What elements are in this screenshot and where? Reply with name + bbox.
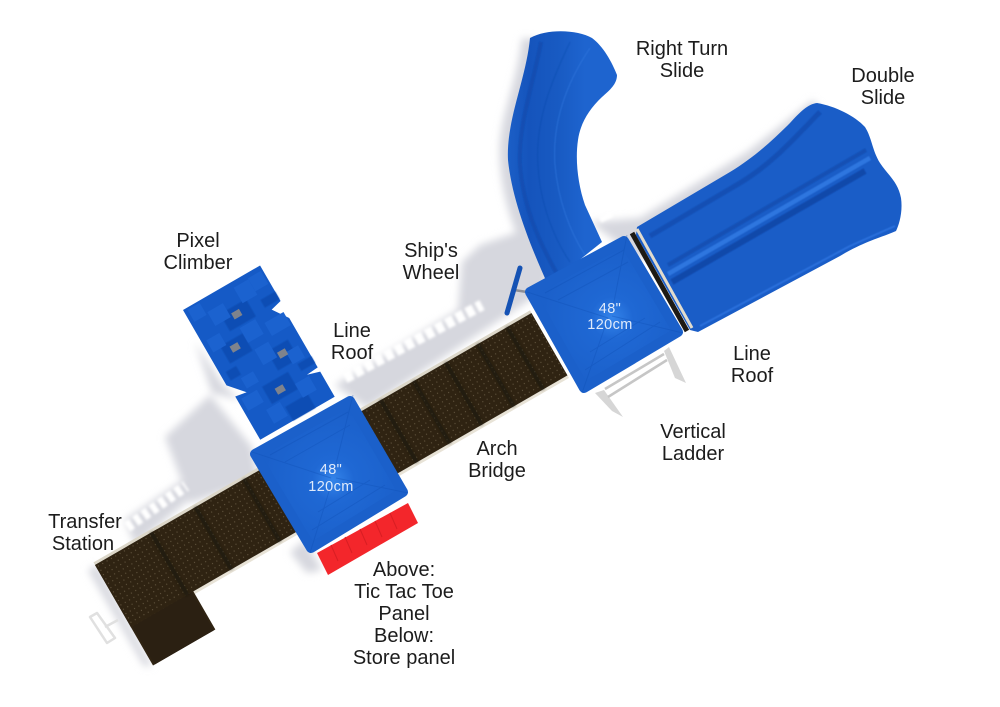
- right turn slide: [508, 31, 617, 285]
- pixel climber: [183, 266, 336, 441]
- transfer station steps: [90, 613, 118, 643]
- red tic tac toe panel: [317, 503, 418, 575]
- label: vertical ladder: Vertical: [660, 421, 726, 443]
- line roof right with 48 inch deck height: 48": [599, 301, 621, 317]
- line roof right with 48 inch deck height: 120cm: [587, 317, 633, 333]
- line roof left with 48 inch deck height: 48": [320, 462, 342, 478]
- label: panels above and below: Below:: [374, 625, 434, 647]
- label: right turn slide: Right Turn: [636, 38, 728, 60]
- label: double slide: Slide: [861, 87, 905, 109]
- line roof left with 48 inch deck height: [252, 395, 408, 553]
- vertical ladder: [595, 347, 686, 417]
- bridge and transfer station deck: [94, 310, 589, 665]
- label: panels above and below: Above:: [373, 559, 435, 581]
- label: ship's wheel: Wheel: [403, 262, 459, 284]
- label: line roof left: Line: [333, 320, 371, 342]
- label: double slide: Double: [851, 65, 915, 87]
- line roof left with 48 inch deck height: 120cm: [308, 479, 354, 495]
- label: transfer station: Station: [52, 533, 114, 555]
- label: line roof right: Roof: [731, 365, 774, 387]
- label: line roof left: Roof: [331, 342, 374, 364]
- ship's wheel: [507, 268, 527, 313]
- beam between roof and double slide: [632, 229, 692, 331]
- label: panels above and below: Tic Tac Toe: [354, 581, 454, 603]
- ground ladder shadows: [127, 206, 612, 527]
- label: ship's wheel: Ship's: [404, 240, 458, 262]
- label: panels above and below: Panel: [378, 603, 430, 625]
- label: right turn slide: Slide: [660, 60, 704, 82]
- label: panels above and below: Store panel: [353, 647, 455, 669]
- label: pixel climber: Pixel: [176, 230, 220, 252]
- label: arch bridge: Arch: [476, 438, 518, 460]
- line roof right with 48 inch deck height: [527, 235, 683, 393]
- label: pixel climber: Climber: [164, 252, 233, 274]
- double slide: [636, 103, 902, 332]
- label: line roof right: Line: [733, 343, 771, 365]
- cast shadows on the ground: [88, 38, 822, 666]
- label: transfer station: Transfer: [48, 511, 122, 533]
- label: vertical ladder: Ladder: [662, 443, 724, 465]
- label: arch bridge: Bridge: [468, 460, 526, 482]
